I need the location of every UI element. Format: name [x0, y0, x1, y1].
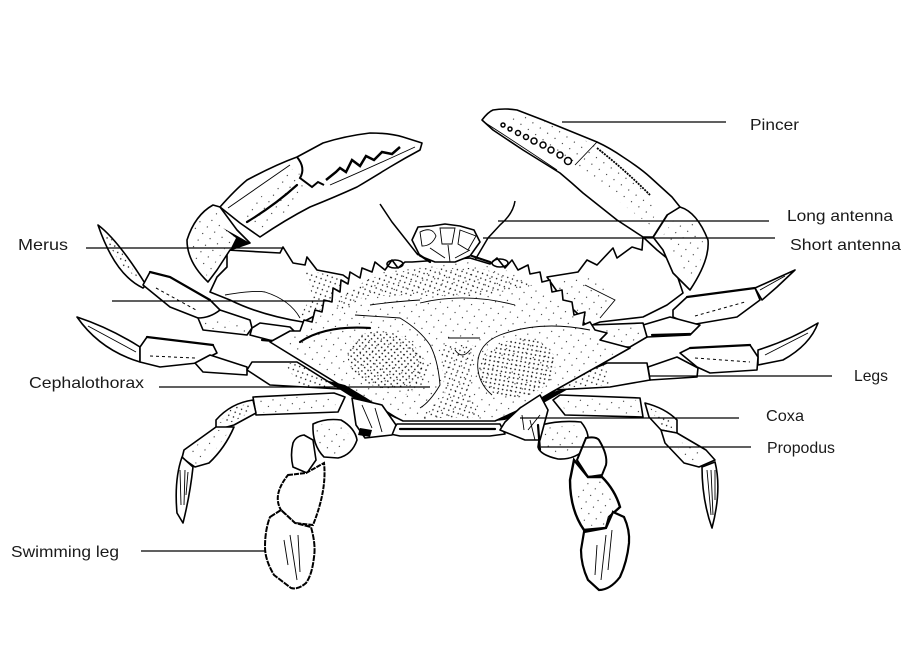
carapace [270, 258, 630, 421]
crab illustration [77, 109, 818, 590]
left claw [187, 133, 422, 322]
right carpus [653, 207, 708, 290]
right swimming leg [538, 421, 629, 590]
unlabelled leader line [112, 300, 330, 302]
right walking leg [553, 395, 718, 528]
label: Cephalothorax: Cephalothorax [29, 375, 144, 392]
abdomen plate and coxae [352, 395, 548, 450]
right second leg [590, 270, 795, 347]
label: Propodus: Propodus [767, 440, 835, 457]
label: Legs: Legs [854, 368, 888, 385]
right antenna [475, 201, 515, 260]
right claw [482, 109, 708, 327]
left pincer [220, 133, 422, 237]
label: Coxa: Coxa [766, 408, 804, 425]
left legs [77, 225, 357, 588]
left carpus [187, 205, 250, 282]
right merus arm [547, 237, 683, 327]
label: Long antenna: Long antenna [787, 208, 893, 225]
label: Swimming leg: Swimming leg [11, 544, 119, 561]
left third leg [77, 317, 340, 389]
right third leg [553, 323, 818, 390]
left gill stipple [341, 323, 429, 397]
central stipple [420, 345, 480, 418]
right gill stipple [474, 330, 562, 406]
left walking leg [176, 393, 345, 523]
label: Short antenna: Short antenna [790, 237, 901, 254]
carapace stippling [280, 262, 620, 419]
left second leg [98, 225, 300, 343]
right pincer [482, 109, 680, 237]
left swimming leg [265, 420, 357, 588]
right pincer teeth [501, 123, 572, 164]
eyes and mouthparts [387, 224, 508, 268]
label: Pincer: Pincer [750, 117, 800, 134]
right legs [538, 270, 818, 590]
left antenna [380, 204, 418, 255]
label: Merus: Merus [18, 237, 68, 254]
left merus arm [210, 247, 350, 322]
